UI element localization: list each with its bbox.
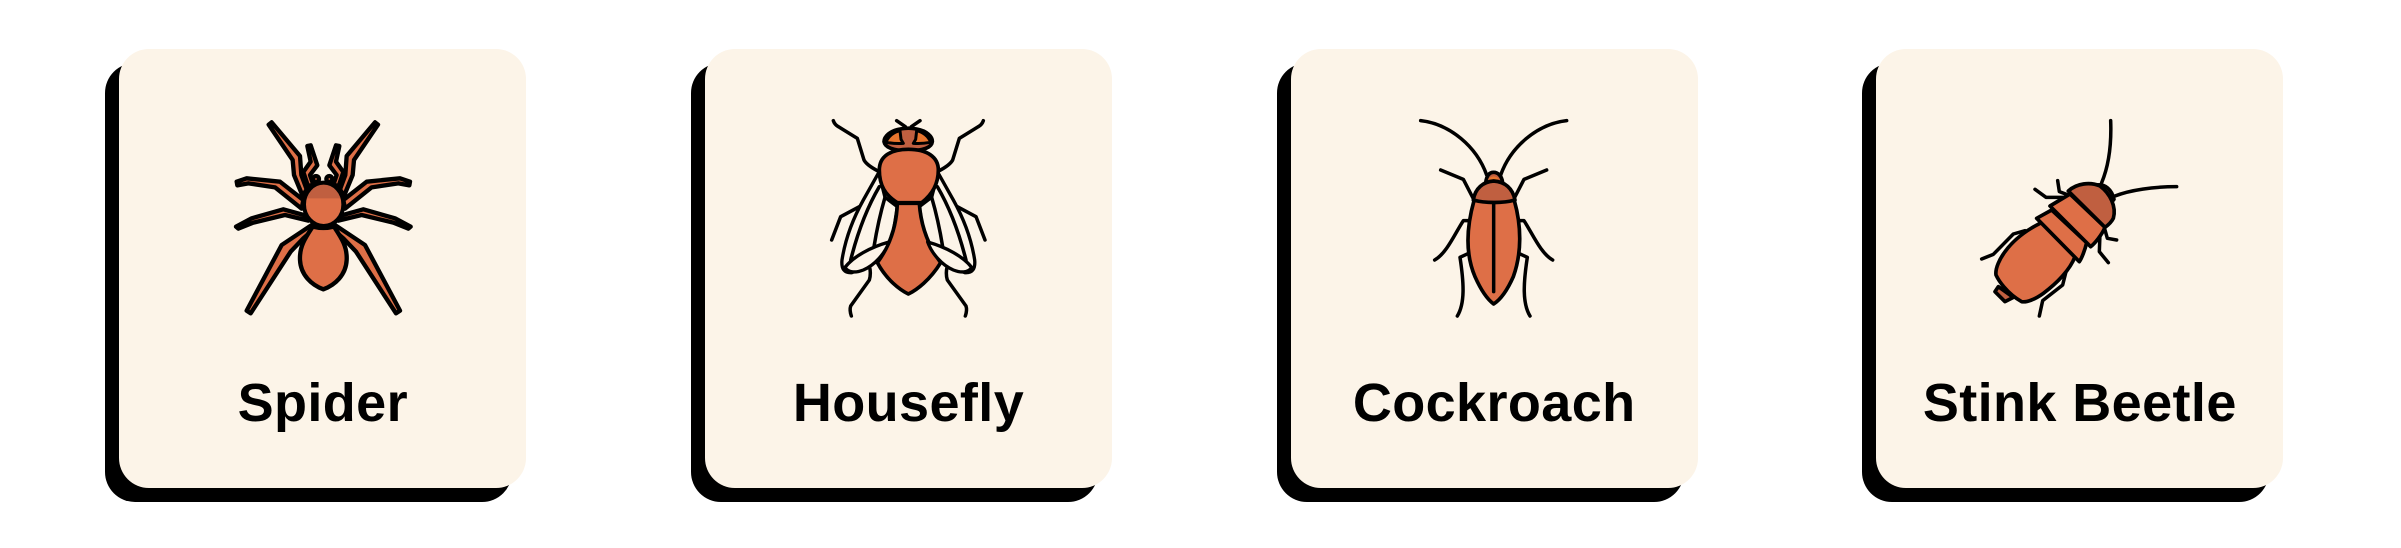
icon: cockroach	[1418, 118, 1568, 318]
panel: spider	[105, 49, 526, 502]
card shadow	[1277, 63, 1684, 502]
icon: stink beetle	[1980, 118, 2178, 318]
card background	[705, 49, 1112, 488]
card shadow	[1862, 63, 2269, 502]
icon: spider	[234, 120, 413, 316]
card background	[1876, 49, 2283, 488]
card background	[119, 49, 526, 488]
panel: cockroach	[1277, 49, 1698, 502]
icon: housefly	[830, 118, 987, 318]
heading: Stink Beetle: Stink Beetle	[1923, 373, 2237, 433]
heading: Housefly: Housefly	[793, 373, 1024, 433]
card shadow	[691, 63, 1098, 502]
heading: Cockroach: Cockroach	[1353, 373, 1636, 433]
panel: stink beetle	[1862, 49, 2283, 502]
card background	[1291, 49, 1698, 488]
heading: Spider: Spider	[238, 373, 408, 433]
panel: housefly	[691, 49, 1112, 502]
card shadow	[105, 63, 512, 502]
